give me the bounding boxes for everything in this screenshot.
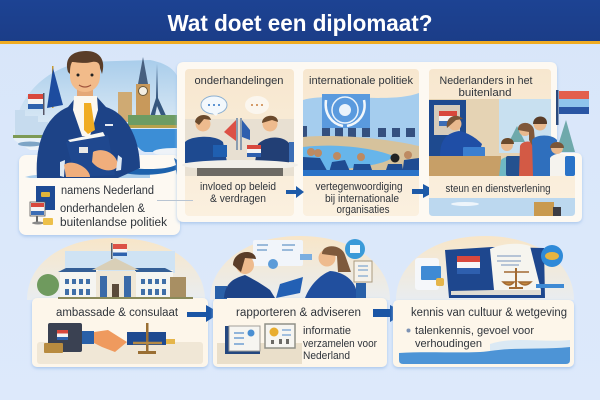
caption: bij internationale: [325, 193, 399, 205]
text: onderhandelen en buitenlandse politiek: onderhandelen &: [60, 203, 145, 215]
caption: [316, 181, 402, 216]
text: informatie verzamelen voor Nederland: informatie: [303, 325, 351, 337]
illustration: water: [399, 340, 570, 364]
connector line: [157, 200, 193, 201]
caption: organisaties: [336, 204, 390, 216]
text: talenkennis, gevoel voor verhoudingen: talenkennis, gevoel voor: [415, 325, 534, 337]
icon: flag on stand: [30, 202, 53, 225]
illustration: luggage and clouds: [429, 198, 575, 216]
text: talenkennis, gevoel voor verhoudingen: [415, 325, 534, 350]
icon: passport: [36, 186, 55, 210]
text: talenkennis, gevoel voor verhoudingen: verhoudingen: [415, 338, 482, 350]
panel: kennis van cultuur en wetgeving: [393, 236, 574, 367]
arrow: reporting to knowledge: [373, 305, 405, 322]
caption: & verdragen: [210, 193, 266, 205]
heading: rapporteren & adviseren: [236, 307, 361, 319]
arrow: diplomat to negotiations: [118, 158, 190, 175]
dutch flag left: [28, 93, 44, 115]
panel: top activities: [157, 62, 589, 222]
text: informatie verzamelen voor Nederland: Nederland: [303, 350, 350, 362]
heading: buitenland: [458, 87, 512, 99]
illustration: UN assembly: [303, 93, 419, 176]
big ben and eiffel tower: [118, 57, 177, 128]
text: informatie verzamelen voor Nederland: [303, 325, 377, 362]
header banner: [0, 0, 600, 44]
illustration: two diplomats at table: [215, 239, 372, 299]
illustration: embassy building: [37, 243, 193, 299]
arrow: embassy to reporting: [187, 305, 220, 322]
illustration: diplomat scene with landmarks: [13, 57, 197, 156]
text: namens Nederland: namens Nederland: [61, 185, 154, 197]
panel: rapporteren en adviseren: [210, 236, 390, 367]
caption: vertegenwoordiging: [316, 181, 402, 193]
water: [130, 129, 177, 152]
heading: ambassade & consulaat: [56, 307, 179, 319]
heading: onderhandelingen: [194, 75, 284, 87]
text: onderhandelen en buitenlandse politiek: [60, 203, 167, 229]
bullet: [406, 328, 410, 332]
text: informatie verzamelen voor Nederland: verzamelen voor: [303, 338, 377, 350]
heading: kennis van cultuur & wetgeving: [411, 307, 567, 319]
panel: namens Nederland: [19, 155, 190, 235]
caption: [200, 181, 276, 205]
card: internationale politiek: [303, 69, 419, 216]
family group: [499, 116, 575, 176]
icon: flag: [111, 243, 127, 259]
caption: invloed op beleid: [200, 181, 276, 193]
illustration: negotiation table: [182, 96, 298, 176]
icon: folder: [66, 132, 115, 177]
arrow: card one to card two: [286, 186, 304, 198]
heading: internationale politiek: [309, 75, 413, 87]
illustration: consular desk: [429, 99, 575, 176]
icon: law book: [415, 244, 564, 298]
icon: Dutch flag on pole: [556, 90, 589, 125]
title: Wat doet een diplomaat?: [168, 10, 432, 36]
text: onderhandelen en buitenlandse politiek: buitenlandse politiek: [60, 217, 167, 229]
card: Nederlanders in het buitenland: [429, 69, 575, 216]
eu flag: [47, 66, 63, 108]
illustration: handshake, briefcase and scales: [37, 323, 203, 364]
illustration: diplomat portrait: [37, 51, 140, 178]
heading: [440, 75, 532, 99]
heading: Nederlanders in het: [440, 75, 532, 87]
panel: ambassade en consulaat: [27, 238, 208, 367]
illustration: report screens: [217, 324, 302, 364]
caption: steun en dienstverlening: [446, 183, 550, 195]
arrow: card two to card three: [412, 184, 436, 198]
card: onderhandelingen: [182, 69, 298, 216]
